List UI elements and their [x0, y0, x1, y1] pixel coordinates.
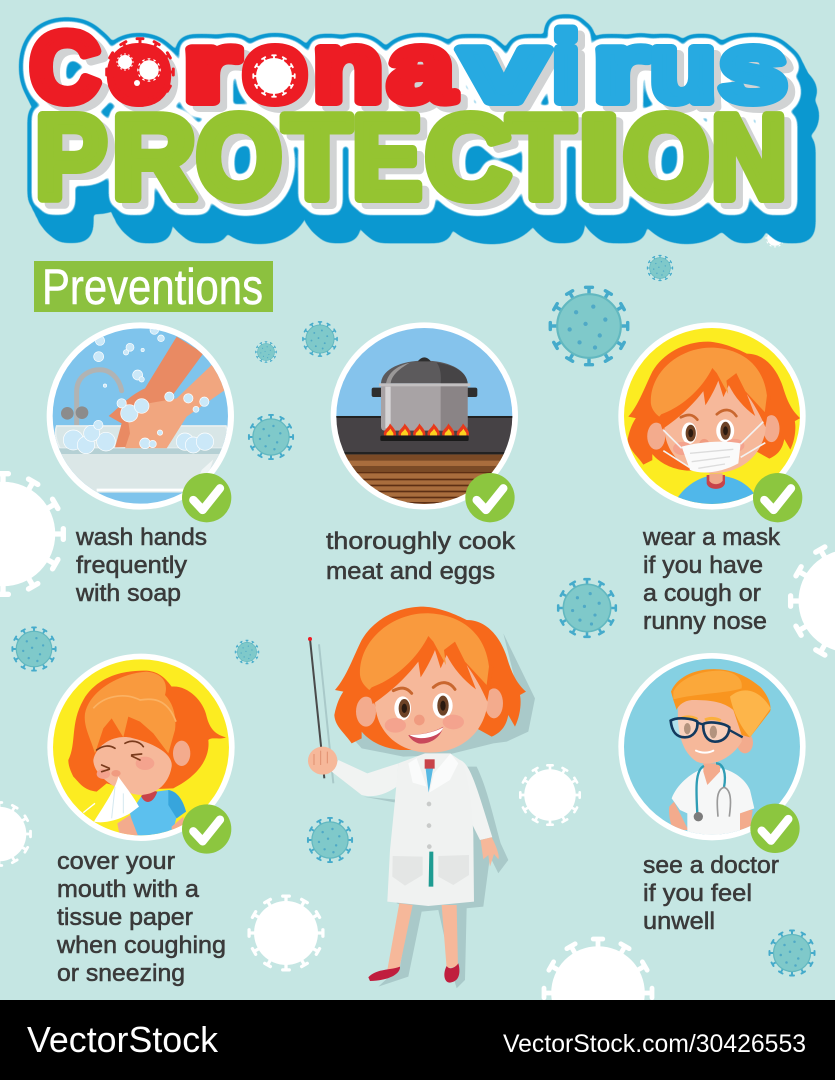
- lab coat: [332, 753, 499, 906]
- icon: hand washing scene: [52, 328, 228, 504]
- text: cook: thoroughly cook: [326, 528, 516, 555]
- text: mask: wear a mask: [642, 524, 781, 551]
- title: O: [196, 91, 282, 224]
- character shadow: [319, 633, 535, 988]
- title: [30, 12, 787, 224]
- text: cook: meat and eggs: [326, 558, 495, 585]
- icon: check mark: [182, 473, 231, 522]
- icon: pot on stove: [336, 328, 512, 504]
- text: doctor: [643, 852, 779, 935]
- title: r: [593, 12, 649, 122]
- title: v: [461, 12, 548, 122]
- icon: girl with mask: [624, 328, 800, 504]
- panel: cook meat and eggs: [326, 320, 520, 585]
- icon: check mark: [182, 804, 231, 854]
- background viruses: [0, 229, 835, 1047]
- title: N: [711, 91, 787, 224]
- teacher character: [308, 607, 535, 988]
- head: [334, 607, 526, 753]
- title: u: [650, 12, 716, 122]
- panel: wear a mask: [617, 320, 807, 635]
- title: O: [623, 91, 709, 224]
- text: cover: or sneezing: [57, 960, 185, 987]
- title: o: [108, 12, 170, 122]
- title: s: [719, 12, 787, 122]
- title: o: [243, 12, 307, 122]
- panel: see a doctor: [617, 650, 807, 935]
- text: mask: if you have: [643, 552, 763, 579]
- title: a: [388, 12, 456, 122]
- hand on pointer: [308, 747, 337, 775]
- title: i: [552, 12, 580, 122]
- title: T: [283, 91, 351, 224]
- icon: check mark: [465, 473, 515, 522]
- text: mask: a cough or: [643, 580, 761, 607]
- watermark bar: [0, 1000, 835, 1080]
- text: doctor: if you feel: [643, 880, 752, 907]
- title: E: [352, 91, 422, 224]
- text: wash hands: [75, 524, 207, 607]
- text: wash hands: wash hands: [75, 524, 207, 551]
- text: cover: tissue paper: [57, 904, 193, 931]
- icon: sneezing girl: [53, 659, 229, 836]
- text: doctor: unwell: [643, 908, 715, 935]
- legs and shoes: [368, 903, 459, 983]
- text: cover: [56, 848, 226, 987]
- panel: wash hands: [47, 320, 237, 607]
- panel: cover your mouth: [47, 650, 237, 987]
- title: C: [30, 12, 100, 122]
- watermark bar: VectorStock: [27, 1019, 219, 1060]
- title: R: [112, 91, 196, 224]
- heading: Preventions: Preventions: [42, 259, 263, 315]
- icon: check mark: [750, 804, 800, 853]
- pointer stick: [308, 637, 324, 778]
- title: C: [425, 91, 511, 224]
- text: mask: runny nose: [643, 608, 767, 635]
- text: mask: [642, 524, 781, 635]
- title: T: [507, 91, 575, 224]
- title: I: [578, 91, 620, 224]
- text: cover: cover your: [57, 848, 175, 875]
- text: cover: mouth with a: [57, 876, 200, 903]
- text: cook: [326, 528, 516, 585]
- text: wash hands: with soap: [75, 580, 181, 607]
- text: wash hands: frequently: [76, 552, 187, 579]
- title: P: [35, 91, 107, 224]
- icon: check mark: [753, 473, 802, 522]
- text: cover: when coughing: [56, 932, 226, 959]
- title: n: [313, 12, 383, 122]
- icon: doctor boy: [624, 658, 800, 835]
- text: doctor: see a doctor: [643, 852, 779, 879]
- watermark bar: VectorStock.com/30426553: [503, 1030, 806, 1058]
- title: r: [183, 12, 239, 122]
